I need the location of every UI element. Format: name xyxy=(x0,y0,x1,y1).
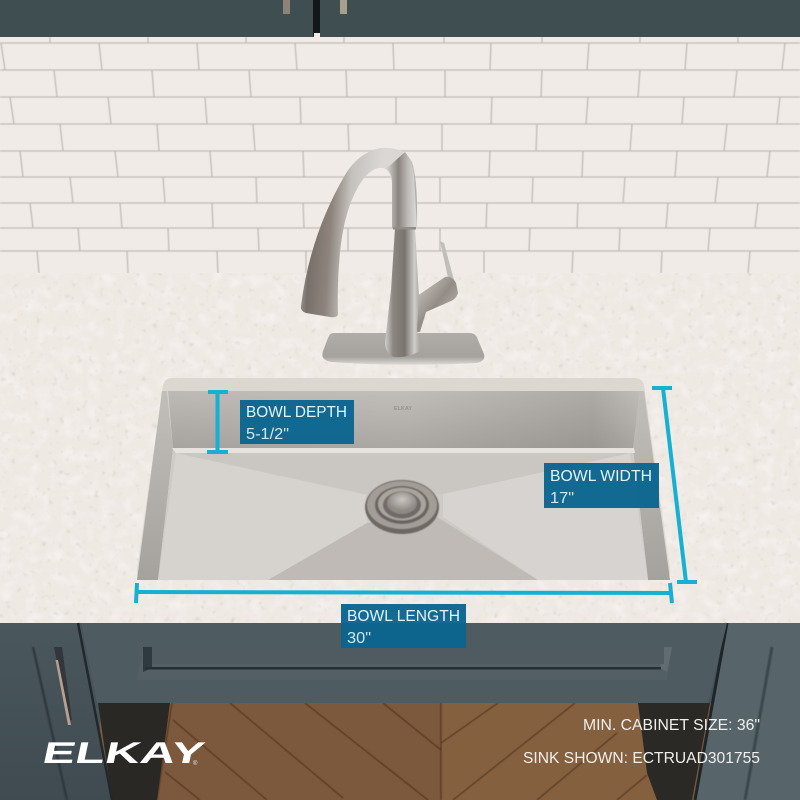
front highlight of the back wall xyxy=(172,448,635,453)
label: bowl width: BOWL WIDTH xyxy=(550,468,652,485)
label: bowl length: BOWL LENGTH xyxy=(347,608,460,625)
logo: Elkay: ® xyxy=(193,760,198,767)
left door xyxy=(0,623,112,800)
left door handle xyxy=(54,647,72,725)
dimension: bowl depth marker xyxy=(207,392,228,452)
left floor facet xyxy=(158,453,367,580)
sink rim xyxy=(137,378,670,580)
bottom floor facet xyxy=(268,517,538,580)
faucet body xyxy=(385,228,421,357)
stainless steel sink xyxy=(137,378,670,580)
subway tile backsplash xyxy=(0,36,800,276)
wood floor xyxy=(100,703,720,800)
upper cabinets xyxy=(0,0,800,38)
deck plate xyxy=(322,333,484,365)
embossed logo on back wall: ELKAY xyxy=(394,406,412,412)
right wall xyxy=(633,391,670,580)
floor plank seams xyxy=(157,703,647,800)
dimension: bowl width marker xyxy=(652,388,697,582)
text: minimum cabinet size: MIN. CABINET SIZE: 36" xyxy=(583,717,760,734)
label: bowl depth xyxy=(240,400,354,444)
dimension: bowl length marker xyxy=(136,583,672,603)
gooseneck spout xyxy=(301,148,417,317)
label: bowl width: 17" xyxy=(550,490,574,507)
handle lever xyxy=(440,241,454,282)
text: sink model shown: SINK SHOWN: ECTRUAD301755 xyxy=(523,750,760,767)
logo: Elkay: ELKAY xyxy=(40,737,207,770)
faucet xyxy=(301,148,484,365)
logo: Elkay xyxy=(40,737,207,770)
gooseneck neck shading xyxy=(386,152,417,228)
right door xyxy=(695,623,800,800)
gooseneck collar xyxy=(393,227,416,230)
speckled quartz countertop xyxy=(0,273,800,624)
dark cabinet interior left xyxy=(98,703,170,800)
label: bowl depth: 5-1/2" xyxy=(246,426,289,443)
top floor facet xyxy=(176,453,630,494)
label: bowl length xyxy=(341,604,466,648)
dark cabinet interior right xyxy=(638,703,710,800)
label: bowl depth: BOWL DEPTH xyxy=(246,404,347,421)
apron panel xyxy=(81,623,727,703)
sink floor xyxy=(158,450,648,580)
right floor facet xyxy=(443,453,648,580)
label: bowl length: 30" xyxy=(347,630,371,647)
lower cabinet base xyxy=(0,623,800,800)
left wall xyxy=(137,391,173,580)
label: bowl width xyxy=(544,463,659,508)
drain xyxy=(365,480,439,534)
back wall xyxy=(168,391,640,449)
handle housing xyxy=(414,277,458,332)
